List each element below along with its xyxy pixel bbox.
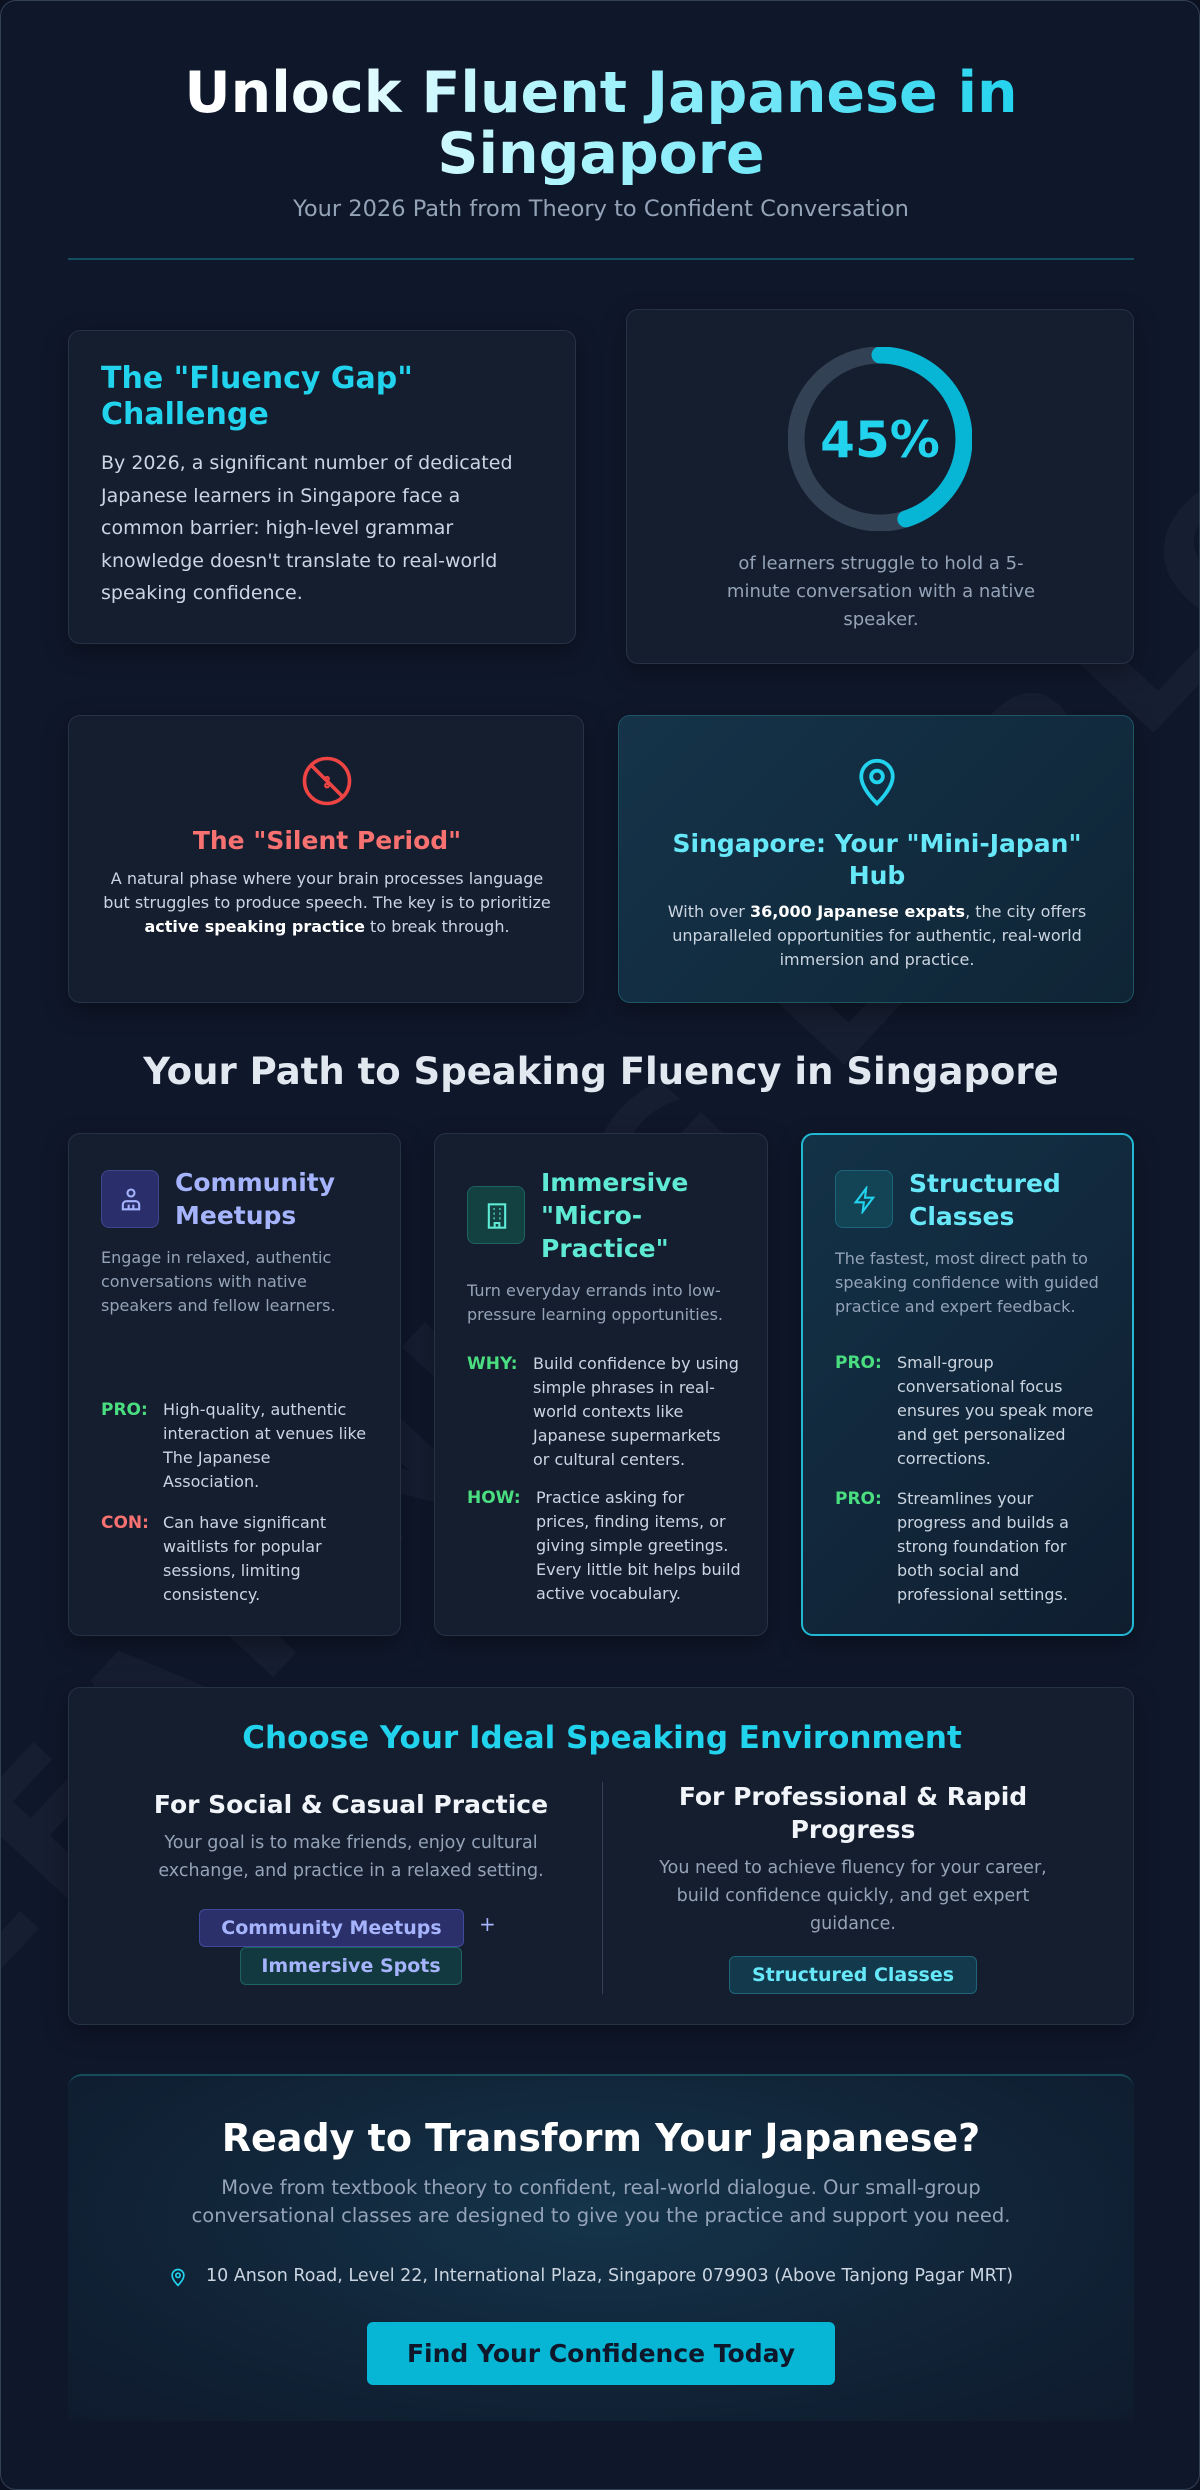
pro 2: Streamlines your progress and builds a strong foundation for both social and professional settings. xyxy=(897,1489,1069,1604)
button: find confidence: Find Your Confidence Today xyxy=(407,2339,795,2368)
tag: immersive spots xyxy=(240,1947,462,1985)
text: mini-japan: With over 36,000 Japanese expats, the city offers unparalleled opportunities for authentic, real-world immersion and practice. xyxy=(668,902,1086,969)
panel: community meetups xyxy=(68,1133,401,1636)
heading: community meetups: Community xyxy=(175,1168,335,1197)
pro 1: PRO: xyxy=(835,1353,882,1373)
text: social: Your goal is to make friends, enjoy cultural exchange, and practice in a relaxed setting. xyxy=(158,1833,544,1881)
title xyxy=(1,63,1200,185)
tag: structured classes xyxy=(729,1956,977,1994)
tag: immersive spots: Immersive Spots xyxy=(261,1955,441,1977)
heading: immersive: Practice" xyxy=(541,1234,669,1263)
heading: social: For Social & Casual Practice xyxy=(154,1790,548,1819)
column: social xyxy=(154,1790,548,1985)
pro 1: Small-group conversational focus ensures you speak more and get personalized corrections. xyxy=(897,1353,1093,1468)
panel: structured classes xyxy=(801,1133,1134,1636)
column: professional xyxy=(659,1782,1047,1994)
icon: map pin xyxy=(859,758,895,806)
text: professional: You need to achieve fluency for your career, build confidence quickly, and get expert guidance. xyxy=(659,1858,1047,1934)
title: Singapore xyxy=(437,121,765,187)
heading: immersive xyxy=(541,1168,688,1263)
why: WHY: xyxy=(467,1354,518,1374)
tag: structured classes: Structured Classes xyxy=(752,1964,954,1986)
text: immersive desc: Turn everyday errands into low-pressure learning opportunities. xyxy=(467,1281,723,1324)
panel: silent period xyxy=(68,715,584,1003)
subtitle: Your 2026 Path from Theory to Confident Conversation xyxy=(293,196,909,222)
how: Practice asking for prices, finding items, or giving simple greetings. Every little bit helps build active vocabulary. xyxy=(536,1488,741,1603)
heading: immersive: Immersive xyxy=(541,1168,688,1197)
text: meetups desc: Engage in relaxed, authentic conversations with native speakers and fellow learners. xyxy=(101,1248,336,1315)
panel: choose environment xyxy=(68,1687,1134,2025)
heading: silent period: The "Silent Period" xyxy=(193,826,461,855)
pro 2: PRO: xyxy=(835,1489,882,1509)
chart: donut 45%: 45% xyxy=(820,411,940,469)
text: structured desc: The fastest, most direct path to speaking confidence with guided practice and expert feedback. xyxy=(835,1249,1099,1316)
heading: professional: For Professional & Rapid Progress xyxy=(679,1782,1027,1844)
icon: address pin xyxy=(171,2268,185,2286)
heading: structured: Classes xyxy=(909,1202,1014,1231)
heading: mini-japan: Singapore: Your "Mini-Japan" Hub xyxy=(672,829,1081,890)
title: Unlock Fluent Japanese in xyxy=(184,60,1018,126)
panel: call to action xyxy=(68,2074,1134,2421)
heading: ready: Ready to Transform Your Japanese? xyxy=(222,2116,980,2160)
text: silent period: A natural phase where your brain processes language but struggles to produce speech. The key is to prioritize active speaking practice to break through. xyxy=(103,869,551,936)
heading: community meetups: Meetups xyxy=(175,1201,296,1230)
con: meetups: Can have significant waitlists for popular sessions, limiting consistency. xyxy=(163,1513,326,1604)
con: meetups: CON: xyxy=(101,1513,149,1533)
stat caption: of learners struggle to hold a 5-minute conversation with a native speaker. xyxy=(727,553,1035,630)
button: find confidence xyxy=(367,2322,835,2385)
column: social: + xyxy=(479,1912,496,1936)
address: 10 Anson Road, Level 22, International Plaza, Singapore 079903 (Above Tanjong Pagar MRT) xyxy=(206,2266,1013,2286)
heading: structured xyxy=(909,1169,1061,1231)
panel: immersive micro-practice xyxy=(434,1133,768,1636)
heading: community meetups xyxy=(175,1168,335,1230)
pro: meetups: High-quality, authentic interaction at venues like The Japanese Association. xyxy=(163,1400,366,1491)
text: fluency gap: By 2026, a significant number of dedicated Japanese learners in Singapore face a common barrier: high-level grammar knowledge doesn't translate to real-world speaking confidence. xyxy=(101,452,513,604)
panel: 45% stat xyxy=(626,309,1134,664)
why: Build confidence by using simple phrases in real-world contexts like Japanese supermarkets or cultural centers. xyxy=(533,1354,739,1469)
icon: people xyxy=(101,1170,159,1228)
heading: fluency gap: The "Fluency Gap" Challenge xyxy=(101,361,413,432)
icon: building xyxy=(467,1186,525,1244)
how: HOW: xyxy=(467,1488,521,1508)
tag: community meetups: Community Meetups xyxy=(221,1917,442,1939)
chart: donut 45% xyxy=(788,347,972,531)
panel: mini-japan hub xyxy=(618,715,1134,1003)
icon: no speaking xyxy=(302,756,352,806)
text: cta: Move from textbook theory to confident, real-world dialogue. Our small-group conversational classes are designed to give you the practice and support you need. xyxy=(192,2176,1010,2227)
tag: community meetups xyxy=(199,1909,464,1947)
section heading: path: Your Path to Speaking Fluency in Singapore xyxy=(143,1050,1059,1093)
pro: meetups: PRO: xyxy=(101,1400,148,1420)
heading: structured: Structured xyxy=(909,1169,1061,1198)
icon: lightning xyxy=(835,1170,893,1228)
heading: choose: Choose Your Ideal Speaking Environment xyxy=(242,1720,962,1756)
heading: immersive: "Micro- xyxy=(541,1201,642,1230)
panel: fluency gap xyxy=(68,330,576,644)
